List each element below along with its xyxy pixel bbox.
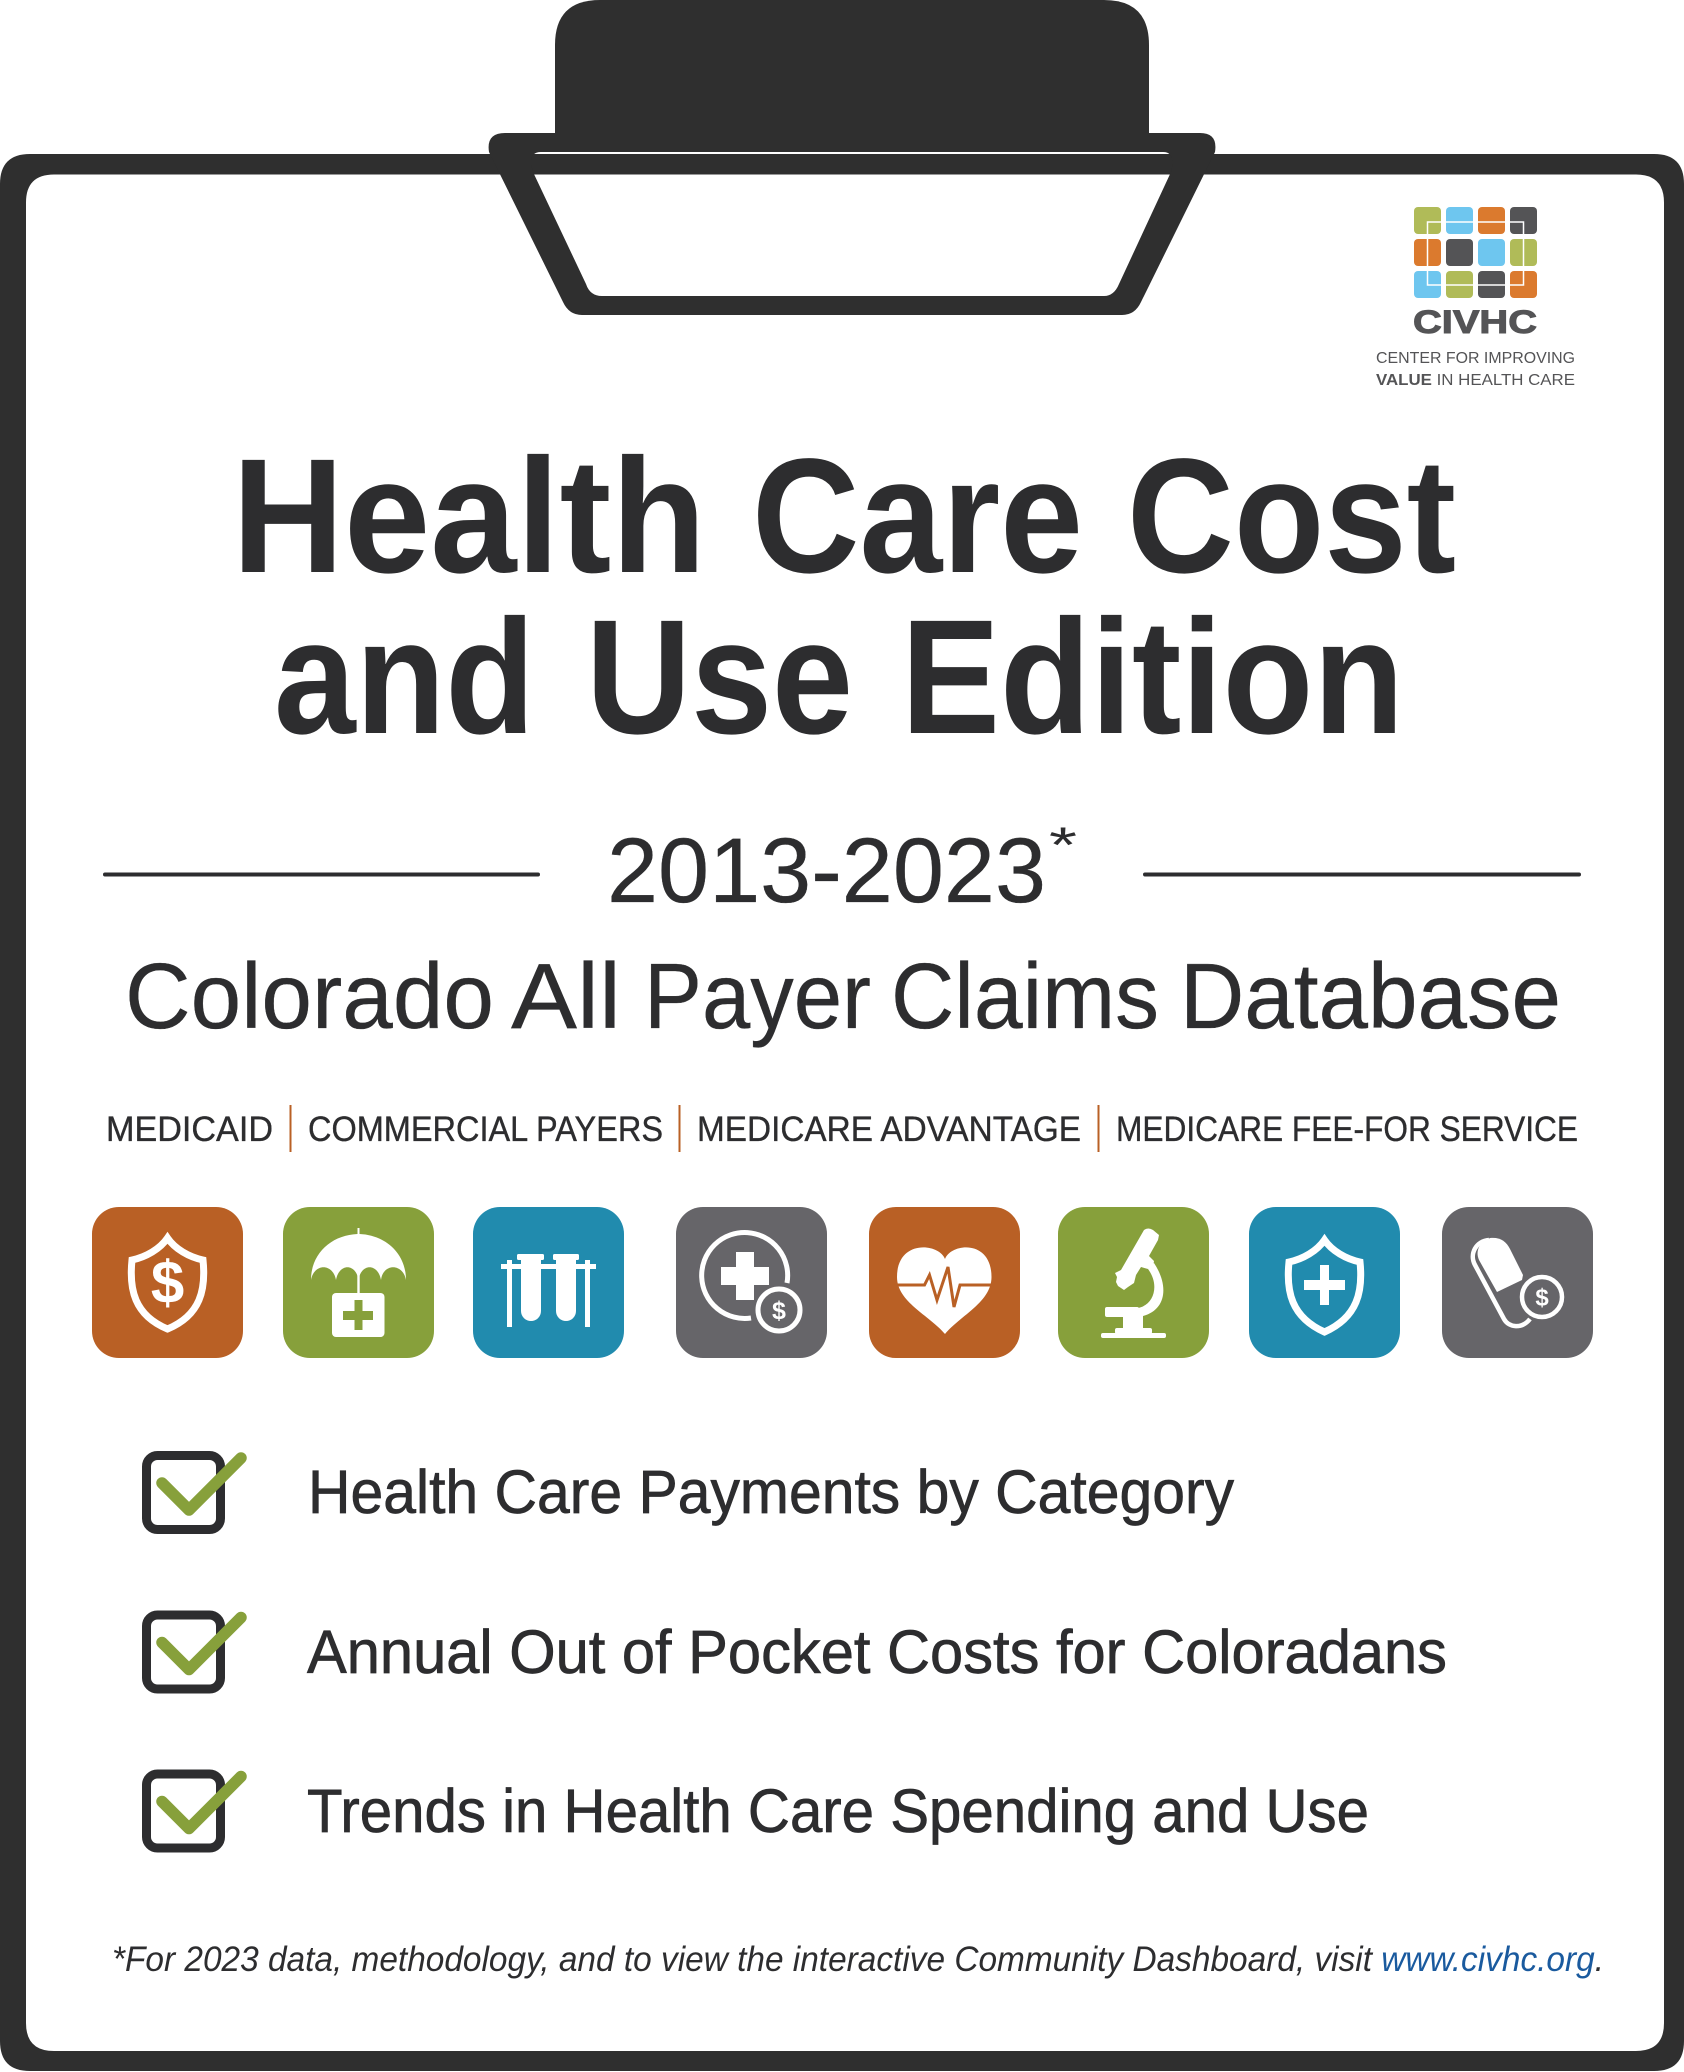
subtitle: Database [1180, 944, 1561, 1048]
title [232, 424, 1456, 768]
icon: microscope [1058, 1207, 1209, 1358]
title: Cost [1127, 424, 1456, 607]
logo tagline: VALUE IN HEALTH CARE [1376, 372, 1575, 389]
icon: medical cross with coin: $ [772, 1297, 786, 1325]
logo tagline: CENTER FOR IMPROVING [1376, 350, 1575, 367]
clip ring [489, 133, 1215, 315]
date range: * [1049, 817, 1077, 873]
title: Edition [901, 585, 1404, 768]
icon: umbrella over first aid kit [283, 1207, 434, 1358]
payer types: MEDICAID [106, 1109, 273, 1149]
subtitle [125, 944, 1561, 1048]
title: Care [752, 424, 1083, 607]
payer types: MEDICARE ADVANTAGE [697, 1109, 1081, 1149]
icon: shield with dollar: $ [151, 1249, 184, 1316]
date range [103, 817, 1581, 922]
footnote: *For 2023 data, methodology, and to view the interactive Community Dashboard, visit www.civhc.org. [112, 1940, 1604, 1979]
icon: shield with cross [1249, 1207, 1400, 1358]
icon: pill with coin: $ [1535, 1284, 1549, 1312]
icon: pill with coin [1442, 1207, 1593, 1358]
item text: Annual Out of Pocket Costs for Coloradans [307, 1618, 1447, 1686]
subtitle: Payer [644, 944, 871, 1048]
item text: Trends in Health Care Spending and Use [307, 1777, 1369, 1845]
subtitle: Colorado [125, 944, 494, 1048]
checklist item 1 [146, 1456, 1234, 1530]
payer types: COMMERCIAL PAYERS [308, 1109, 663, 1149]
icon: heart with pulse [869, 1207, 1020, 1358]
subtitle: Claims [891, 944, 1159, 1048]
clipboard clip [489, 0, 1215, 315]
clip tab [555, 0, 1149, 140]
title: and [274, 585, 535, 768]
icon: test tubes [473, 1207, 624, 1358]
logo tagline [1376, 350, 1575, 389]
logo wordmark: CIVHC [1413, 304, 1537, 340]
icon: checkbox [146, 1456, 241, 1530]
item text: Health Care Payments by Category [308, 1458, 1234, 1526]
icon: medical cross with coin [676, 1207, 827, 1358]
payer types: MEDICARE FEE-FOR SERVICE [1116, 1109, 1578, 1149]
title: Use [586, 585, 853, 768]
title: Health [232, 424, 706, 607]
logo tile grid [1414, 207, 1537, 298]
checklist item 3 [146, 1774, 1369, 1848]
icon: checkbox [146, 1774, 241, 1848]
date range: 2013-2023 [607, 820, 1046, 922]
checklist item 2 [146, 1615, 1447, 1689]
icon: checkbox [146, 1615, 241, 1689]
logo: CIVHC [1376, 207, 1575, 389]
payer types [106, 1105, 1578, 1152]
icon: shield with dollar [92, 1207, 243, 1358]
subtitle: All [511, 944, 621, 1048]
